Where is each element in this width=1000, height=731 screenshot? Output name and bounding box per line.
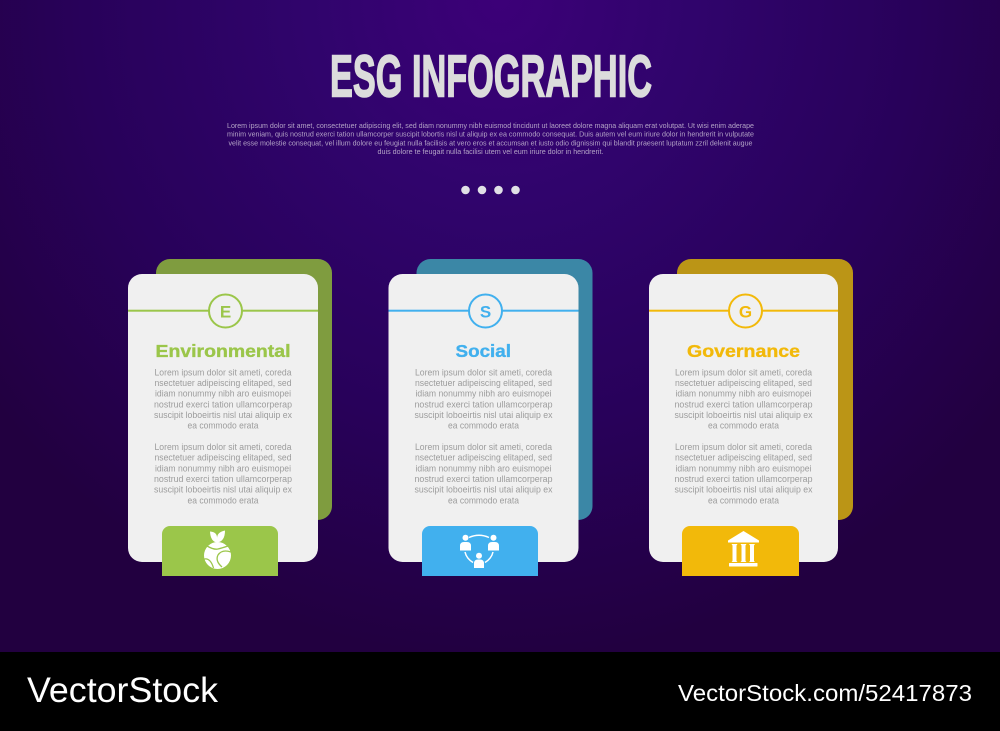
body text: governance [674,368,813,505]
body text: environmental: suscipit loboeirtis nisl utai aliquip ex [154,485,292,495]
body text: environmental: nsectetuer adipeiscing elitaped, sed [154,453,292,463]
icon: institution building [728,531,759,566]
body text: environmental: idiam nonummy nibh aro euismopei [155,463,291,473]
body text: environmental: Lorem ipsum dolor sit ameti, coreda [154,368,292,378]
heading: governance: Governance [687,341,800,361]
body text: governance: nostrud exerci tation ullamcorperap [674,474,812,484]
icon: connected people [460,535,499,568]
icon tab: governance [682,526,799,576]
footer image id: VectorStock.com/52417873 [678,680,972,706]
intro text: velit esse molestie consequat, vel illum dolore eu feugiat nulla facilisis at vero eros et accumsan et iusto odio dignissim qui blandit praesent luptatum zzril delenit augue [228,138,752,147]
intro text: Lorem ipsum dolor sit amet, consectetuer adipiscing elit, sed diam nonummy nibh euismod tincidunt ut laoreet dolore magna aliquam erat volutpat. Ut wisi enim aderape [227,121,754,130]
back card: social [416,259,592,520]
body text: social: Lorem ipsum dolor sit ameti, coreda [415,368,552,378]
body text: governance: ea commodo erata [708,421,779,431]
body text: governance: Lorem ipsum dolor sit ameti, coreda [675,442,812,452]
body text: governance: ea commodo erata [708,495,779,505]
body text: social: suscipit loboeirtis nisl utai aliquip ex [414,485,553,495]
body text: social: suscipit loboeirtis nisl utai aliquip ex [414,410,553,420]
intro text: minim veniam, quis nostrud exerci tation ullamcorper suscipit lobortis nisl ut aliquip ex ea commodo consequat. Duis autem vel eum iriure dolor in hendrerit in vulputate [227,130,754,139]
body text: governance: suscipit loboeirtis nisl utai aliquip ex [674,410,813,420]
icon tab: environmental [162,526,278,576]
letter badge: G [729,294,762,328]
body text: governance: nostrud exerci tation ullamcorperap [674,399,812,409]
divider line: governance [649,310,838,312]
intro text [227,121,754,156]
body text: governance: suscipit loboeirtis nisl utai aliquip ex [674,485,813,495]
letter badge: E [209,294,242,328]
back card: environmental [156,259,332,520]
footer logo text: VectorStock [27,671,219,710]
body text: social: nsectetuer adipeiscing elitaped, sed [415,453,552,463]
body text: social: ea commodo erata [448,421,519,431]
letter badge: E: E [220,302,231,321]
letter badge: S: S [480,302,491,321]
body text: governance: idiam nonummy nibh aro euismopei [676,463,812,473]
body text: social: ea commodo erata [448,495,519,505]
body text: governance: Lorem ipsum dolor sit ameti, coreda [675,368,812,378]
front card: social [388,274,578,562]
body text: governance: nsectetuer adipeiscing elitaped, sed [675,453,812,463]
body text: social [414,368,553,505]
body text: social: nostrud exerci tation ullamcorperap [414,399,552,409]
body text: environmental: nostrud exerci tation ullamcorperap [154,399,292,409]
footer bar [0,652,1000,731]
intro text: duis dolore te feugait nulla facilisi utem vel eum iriure dolor in hendrerit. [378,147,604,156]
body text: environmental: ea commodo erata [188,421,258,431]
divider line: environmental [128,310,318,312]
heading: social: Social [456,341,511,361]
panel: environmental [128,259,332,576]
body text: environmental: suscipit loboeirtis nisl utai aliquip ex [154,410,292,420]
title: ESG INFOGRAPHIC [330,43,652,109]
body text: environmental: idiam nonummy nibh aro euismopei [155,389,291,399]
panel: governance [649,259,853,576]
body text: environmental: ea commodo erata [188,495,258,505]
heading: environmental: Environmental [156,341,290,361]
body text: environmental: Lorem ipsum dolor sit ameti, coreda [154,442,292,452]
body text: social: Lorem ipsum dolor sit ameti, coreda [415,442,552,452]
body text: governance: idiam nonummy nibh aro euismopei [676,389,812,399]
panel: social [388,259,592,576]
icon: globe with sprout [204,530,231,569]
divider line: social [388,310,578,312]
body text: social: nsectetuer adipeiscing elitaped, sed [415,378,552,388]
body text: environmental: nsectetuer adipeiscing elitaped, sed [154,378,292,388]
letter badge: G: G [739,302,752,321]
body text: governance: nsectetuer adipeiscing elitaped, sed [675,378,812,388]
body text: environmental: nostrud exerci tation ullamcorperap [154,474,292,484]
body text: social: idiam nonummy nibh aro euismopei [416,463,552,473]
icon tab: social [422,526,538,576]
front card: governance [649,274,838,562]
front card: environmental [128,274,318,562]
body text: social: nostrud exerci tation ullamcorperap [414,474,552,484]
body text: environmental [154,368,292,505]
back card: governance [677,259,853,520]
body text: social: idiam nonummy nibh aro euismopei [416,389,552,399]
letter badge: S [469,294,502,328]
pagination dots [461,186,520,194]
